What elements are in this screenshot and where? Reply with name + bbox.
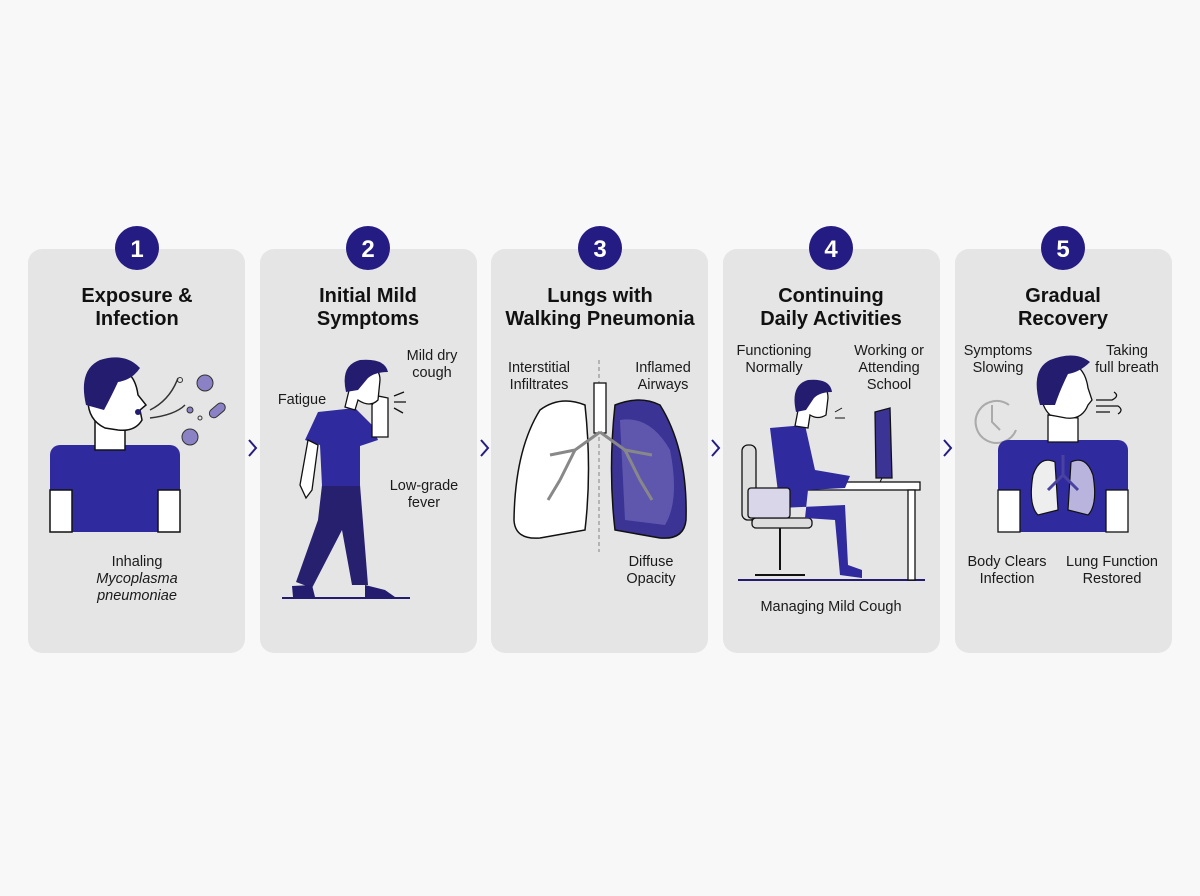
number badge 5: 5 xyxy=(1056,236,1070,263)
title 2: Initial Mild xyxy=(319,285,417,307)
number badge 3: 3 xyxy=(593,236,607,263)
labels 5: Slowing xyxy=(973,360,1023,376)
illustration: person inhaling xyxy=(50,357,227,532)
label: inhaling: Mycoplasma xyxy=(96,571,178,587)
title 3: Lungs with xyxy=(547,285,653,307)
labels 2: cough xyxy=(412,365,452,381)
panel 5: gradual recovery: Infection xyxy=(980,571,1034,587)
label: inhaling: pneumoniae xyxy=(96,588,177,604)
panel 4: daily activities xyxy=(723,226,940,653)
panel 2: initial mild symptoms: Fatigue xyxy=(278,392,326,408)
panel 5: gradual recovery: Lung Function xyxy=(1066,554,1158,570)
title 1: Exposure & xyxy=(81,285,193,307)
title 1: Infection xyxy=(95,308,179,330)
number badge 4: 4 xyxy=(824,236,838,263)
labels 5: Symptoms xyxy=(964,343,1032,359)
panel 2: initial mild symptoms: Low-grade xyxy=(390,478,458,494)
title 4: Continuing xyxy=(778,285,884,307)
arrow 2-3 xyxy=(481,440,488,456)
arrow 1-2 xyxy=(249,440,256,456)
labels 4: Normally xyxy=(745,360,803,376)
panel 5: gradual recovery: full breath xyxy=(1095,360,1159,376)
arrow 4-5 xyxy=(944,440,951,456)
panel 5: gradual recovery: Restored xyxy=(1083,571,1141,587)
panel 3: lungs xyxy=(491,226,708,653)
panel 3: lungs: Diffuse xyxy=(629,554,673,570)
panel 5: gradual recovery xyxy=(955,226,1172,653)
illustration: person breathing with lungs xyxy=(998,355,1128,532)
arrow 3-4 xyxy=(712,440,719,456)
number badge 2 xyxy=(346,226,390,270)
number badge 1 xyxy=(115,226,159,270)
number badge 4 xyxy=(809,226,853,270)
labels 2: Mild dry xyxy=(407,348,457,364)
title 3: Walking Pneumonia xyxy=(505,308,696,330)
panel 4: daily activities: School xyxy=(867,377,911,393)
panel 5: gradual recovery: Body Clears xyxy=(968,554,1046,570)
number badge 3 xyxy=(578,226,622,270)
number badge 2: 2 xyxy=(361,236,375,263)
panel 3: lungs: Inflamed xyxy=(635,360,691,376)
number badge 5 xyxy=(1041,226,1085,270)
panel 5: gradual recovery: Taking xyxy=(1106,343,1148,359)
labels 4: Functioning xyxy=(737,343,811,359)
illustration: person at desk xyxy=(738,380,925,580)
icon: clock xyxy=(976,401,1016,443)
label: inhaling: Inhaling xyxy=(112,554,162,570)
panel 3: lungs: Opacity xyxy=(626,571,676,587)
panel 4: daily activities: Working or xyxy=(854,343,924,359)
panel 3: lungs: Airways xyxy=(638,377,688,393)
panel 4: daily activities: Attending xyxy=(858,360,920,376)
illustration: walking coughing man xyxy=(282,360,410,598)
panel 2: initial mild symptoms xyxy=(260,226,477,653)
title 4: Daily Activities xyxy=(760,308,902,330)
panel 4: daily activities: Managing Mild Cough xyxy=(760,599,902,615)
title 5: Gradual xyxy=(1025,285,1101,307)
illustration: lungs xyxy=(514,360,686,552)
labels 3: Interstitial xyxy=(508,360,570,376)
labels 3: Infiltrates xyxy=(510,377,568,393)
panel 1: exposure & infection xyxy=(28,226,245,653)
title 5: Recovery xyxy=(1018,308,1109,330)
title 2: Symptoms xyxy=(317,308,419,330)
panel 2: initial mild symptoms: fever xyxy=(408,495,440,511)
number badge 1: 1 xyxy=(130,236,144,263)
